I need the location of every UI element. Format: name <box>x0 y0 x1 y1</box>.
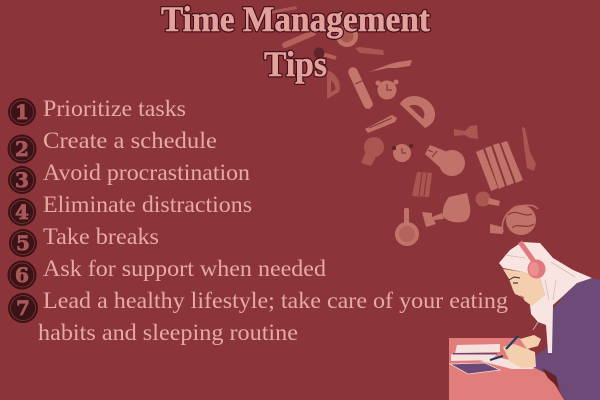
title <box>161 0 430 84</box>
tips list <box>8 96 508 346</box>
headphones <box>520 242 546 278</box>
tip 7: Lead a healthy lifestyle; take care of your eating <box>43 288 508 314</box>
hoodie <box>533 278 600 400</box>
tip 6: Ask for support when needed <box>43 256 326 282</box>
icon: pencil <box>365 115 397 133</box>
tip 3: 3 <box>15 168 29 192</box>
tip 1: Prioritize tasks <box>43 96 186 122</box>
tip 5: 5 <box>16 231 30 255</box>
icon: flask <box>476 192 500 206</box>
tip 4: 4 <box>15 200 29 224</box>
icon: compass circle <box>336 25 358 47</box>
icon: globe <box>490 205 538 235</box>
icon: top pencil <box>270 6 297 14</box>
icon: protractor <box>400 96 435 128</box>
icon: second clock <box>392 144 413 162</box>
tip 3: Avoid procrastination <box>43 160 250 186</box>
hands and pen <box>503 335 541 368</box>
tip 5: Take breaks <box>43 224 159 250</box>
desk shadow <box>542 368 559 388</box>
icon: paint brush <box>522 127 536 171</box>
icon: small trophy <box>454 125 478 139</box>
icon: large light bulb <box>425 145 465 176</box>
icon: book stack <box>476 141 523 191</box>
title: Tips <box>264 44 327 84</box>
hair <box>499 242 592 353</box>
tip 2: Create a schedule <box>43 128 217 154</box>
icon: frying pan <box>395 208 419 246</box>
icon: crayon <box>355 47 384 55</box>
stacked books <box>451 344 500 361</box>
tip 1: 1 <box>15 100 29 124</box>
desk <box>449 338 564 400</box>
tip 2: 2 <box>15 137 29 161</box>
icon: left light bulb <box>361 137 384 166</box>
tip 4: Eliminate distractions <box>43 192 252 218</box>
notebook <box>450 363 500 374</box>
tip 2 <box>8 128 217 164</box>
title: Tips <box>264 44 327 84</box>
title: Time Management <box>161 0 430 39</box>
open paper <box>480 356 535 369</box>
tip 7: 7 <box>16 296 30 320</box>
tip 6 <box>8 256 326 290</box>
tip 4 <box>8 192 252 226</box>
icon: alarm clock <box>376 80 398 100</box>
tip 1 <box>8 96 186 126</box>
title: Time Management <box>161 0 430 39</box>
icon: marker <box>285 33 313 45</box>
icon: pen nib <box>369 60 412 72</box>
floating study icons <box>270 6 538 246</box>
icon: D set square <box>327 70 340 99</box>
face <box>503 269 545 306</box>
tip 5 <box>9 224 159 257</box>
tip 3 <box>8 160 250 194</box>
icon: large trophy <box>422 193 470 227</box>
icon: stamp <box>314 48 336 58</box>
icon: small books <box>412 172 432 197</box>
tip 7: habits and sleeping routine <box>38 320 298 346</box>
tip 7 <box>8 288 508 346</box>
icon: tube <box>353 72 368 104</box>
illustration: student writing at a desk <box>449 242 600 400</box>
tip 6: 6 <box>15 263 29 287</box>
